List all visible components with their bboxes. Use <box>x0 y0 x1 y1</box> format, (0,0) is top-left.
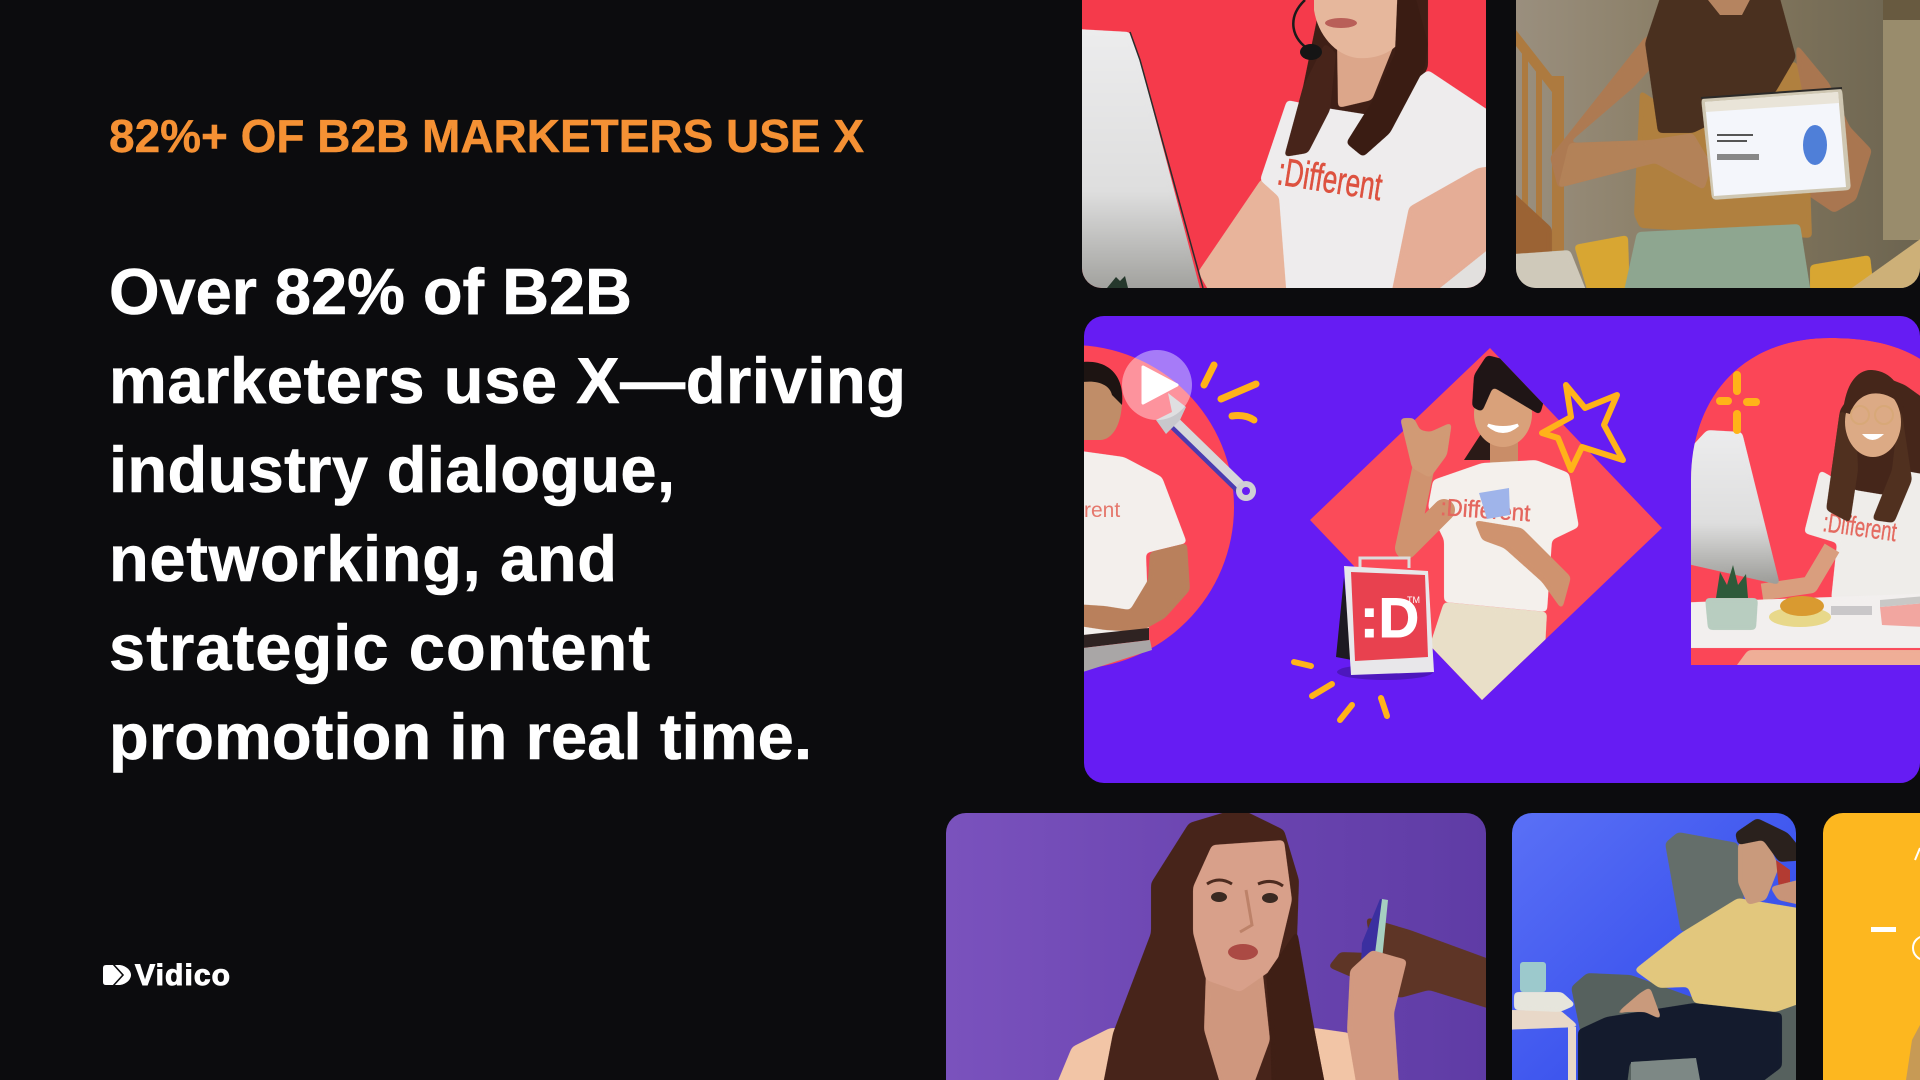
trousers <box>1578 1003 1782 1080</box>
right red arch with woman at desk <box>1670 338 1920 680</box>
sandwich board sign <box>1336 558 1434 680</box>
face <box>1193 840 1292 992</box>
shirt <box>1634 898 1810 1012</box>
legs <box>1726 650 1920 680</box>
headset <box>1292 0 1306 46</box>
photo card: woman on purple background <box>946 808 1500 1080</box>
logo: Vidico: Vidico <box>135 959 230 992</box>
head <box>1084 382 1122 440</box>
wrench <box>1156 393 1256 501</box>
left arm <box>1199 180 1286 288</box>
trousers <box>1425 602 1547 720</box>
yellow dashes near sign <box>1294 662 1387 720</box>
photo card: woman holding tablet <box>1500 0 1920 300</box>
arm <box>1762 548 1832 592</box>
hair back <box>1826 370 1920 523</box>
plant pot <box>1705 598 1758 630</box>
neck <box>1490 442 1518 463</box>
shirt text: rent <box>1084 499 1120 522</box>
video panel: purple background <box>1084 316 1920 783</box>
trousers <box>1083 640 1152 672</box>
hair strand <box>1266 930 1328 1080</box>
armchair back <box>1665 832 1744 933</box>
hair <box>1100 808 1328 1080</box>
face <box>1474 388 1532 447</box>
main statement text: industry dialogue, <box>109 433 675 506</box>
neck front <box>1204 965 1270 1080</box>
notebook <box>1831 606 1872 615</box>
man's arm <box>1084 544 1190 631</box>
hand on phone <box>1770 877 1810 907</box>
hair <box>1472 355 1545 415</box>
front hair <box>1346 0 1428 157</box>
photo card: red background woman with monitor <box>1082 0 1486 288</box>
yellow dashes near wrench <box>1204 365 1256 420</box>
phone <box>1776 860 1790 903</box>
eyes <box>1211 892 1278 903</box>
belt <box>1083 628 1149 648</box>
phone <box>1359 899 1386 1003</box>
pastry <box>1780 596 1824 616</box>
yellow star outline <box>1542 385 1623 470</box>
main statement text <box>109 255 906 773</box>
lips <box>1228 944 1258 960</box>
armchair body <box>1571 973 1810 1080</box>
mug <box>1520 962 1546 992</box>
photo card: yellow background partial <box>1823 813 1920 1080</box>
sandwich board sign: :D <box>1360 586 1419 649</box>
shirt logo: :Different <box>1275 150 1385 209</box>
books <box>1514 992 1576 1012</box>
t-shirt <box>1260 71 1486 288</box>
man's shirt <box>1084 451 1186 635</box>
left red circle with man <box>1084 346 1234 672</box>
monitor <box>1082 29 1200 288</box>
left arm and shoulder <box>1550 36 1649 187</box>
raised arm <box>1406 465 1444 548</box>
door <box>1883 20 1920 240</box>
main statement text: promotion in real time. <box>109 700 812 773</box>
dark hand <box>1328 917 1500 1012</box>
blouse <box>1050 1028 1362 1080</box>
light hand and forearm <box>1347 950 1407 1080</box>
seat <box>1631 1058 1700 1080</box>
monitor <box>1670 430 1780 585</box>
hair <box>1735 818 1810 862</box>
eyebrow heading: 82%+ OF B2B MARKETERS USE X <box>109 110 864 162</box>
tablet <box>1701 88 1851 200</box>
hair <box>1645 0 1796 133</box>
phone <box>1479 488 1510 519</box>
hair back <box>1298 0 1428 114</box>
sandwich board sign: TM <box>1407 595 1420 605</box>
tank top <box>1634 60 1812 238</box>
ponytail <box>1464 434 1490 460</box>
shirt logo: :Different <box>1440 494 1532 527</box>
arm and hand <box>1474 520 1571 610</box>
skirt <box>1624 224 1810 288</box>
waving hand <box>1400 418 1452 478</box>
photo card: man in armchair on blue background <box>1500 813 1810 1080</box>
plant <box>1107 276 1128 288</box>
hair top <box>1843 370 1904 414</box>
main statement text: marketers use X—driving <box>109 344 906 417</box>
front hair <box>1826 410 1858 523</box>
shirt <box>1804 470 1920 600</box>
face <box>1314 0 1398 58</box>
main statement text: Over 82% of B2B <box>109 255 632 328</box>
t-shirt <box>1428 460 1579 612</box>
yellow sparkle <box>1720 375 1756 430</box>
plant <box>1716 565 1748 598</box>
face <box>1738 838 1779 905</box>
pink box <box>1880 603 1920 627</box>
glasses <box>1851 406 1893 424</box>
chair behind <box>1440 251 1486 288</box>
forearm <box>1558 133 1712 190</box>
nose shadow <box>1240 890 1252 932</box>
neck <box>1337 49 1392 107</box>
staircase <box>1516 30 1564 251</box>
brows <box>1207 880 1283 886</box>
face <box>1845 387 1901 457</box>
right arm <box>1796 43 1872 213</box>
hand on knee <box>1612 987 1662 1020</box>
red diamond with woman <box>1310 348 1662 720</box>
play button <box>1122 350 1192 420</box>
main statement text: strategic content <box>109 611 650 684</box>
right arm <box>1392 166 1486 288</box>
side table <box>1500 1010 1580 1030</box>
desk <box>1670 593 1920 648</box>
chin <box>1708 0 1750 15</box>
main statement text: networking, and <box>109 522 617 595</box>
plate <box>1769 607 1831 627</box>
blankets and sofa <box>1516 250 1586 288</box>
